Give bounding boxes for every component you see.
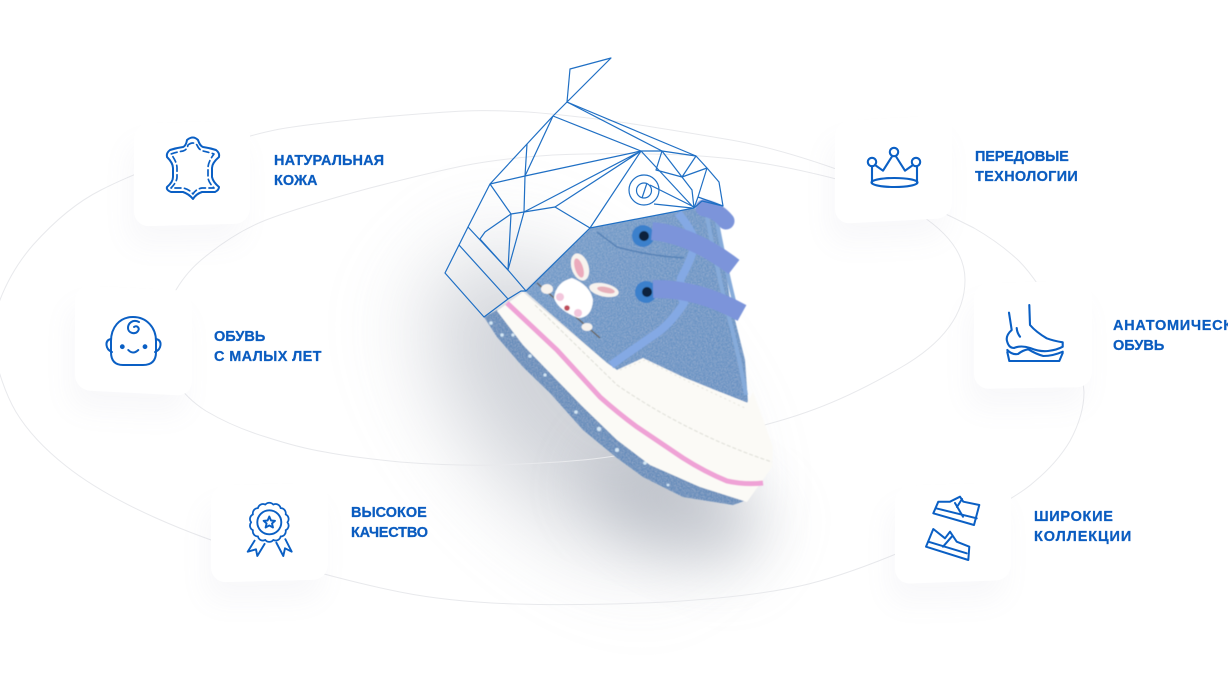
label: advanced technology: ПЕРЕДОВЫЕ — [975, 149, 1069, 165]
label: from early age: С МАЛЫХ ЛЕТ — [214, 348, 322, 364]
icon: rosette medal — [248, 503, 292, 556]
label: high quality: КАЧЕСТВО — [351, 524, 428, 540]
label: anatomical footwear — [1113, 318, 1228, 354]
shoe upper denim — [525, 208, 748, 403]
card: high quality — [211, 482, 328, 583]
eyelets — [632, 225, 657, 303]
pink stripe — [507, 303, 763, 484]
icon: leather hide — [167, 138, 219, 199]
geometric wireframe heel — [445, 58, 723, 317]
card: anatomical footwear — [974, 281, 1092, 389]
label: wide collections — [1034, 509, 1132, 544]
orbit lines — [0, 111, 1084, 605]
label: wide collections: КОЛЛЕКЦИИ — [1034, 528, 1132, 544]
label: from early age — [214, 329, 322, 364]
label: natural leather: НАТУРАЛЬНАЯ — [274, 153, 384, 169]
central lace stripes — [707, 217, 746, 395]
icon: crown — [868, 148, 920, 187]
laces — [652, 208, 742, 313]
sole denim — [484, 310, 747, 505]
toe cap seams — [535, 305, 772, 462]
icon: pair of shoes — [926, 497, 979, 560]
label: anatomical footwear: ОБУВЬ — [1113, 338, 1164, 354]
card: wide collections — [895, 482, 1011, 584]
label: high quality — [351, 505, 428, 540]
shoe drop shadow — [379, 208, 781, 602]
label: advanced technology: ТЕХНОЛОГИИ — [975, 168, 1078, 184]
label: advanced technology — [975, 149, 1078, 184]
icon: baby face — [106, 317, 161, 365]
label: natural leather — [274, 153, 384, 188]
piping — [611, 213, 695, 365]
label: wide collections: ШИРОКИЕ — [1034, 509, 1114, 525]
shoe photo — [484, 208, 773, 505]
label: natural leather: КОЖА — [274, 172, 318, 188]
sole dots — [489, 321, 669, 486]
card: advanced technology — [835, 115, 952, 224]
white midsole and toe cap — [497, 292, 773, 502]
icon: foot on insole — [1007, 305, 1063, 361]
label: from early age: ОБУВЬ — [214, 329, 265, 345]
card: from early age — [75, 285, 192, 396]
label: high quality: ВЫСОКОЕ — [351, 505, 427, 521]
card: natural leather — [134, 120, 250, 227]
bunny applique — [537, 251, 620, 338]
